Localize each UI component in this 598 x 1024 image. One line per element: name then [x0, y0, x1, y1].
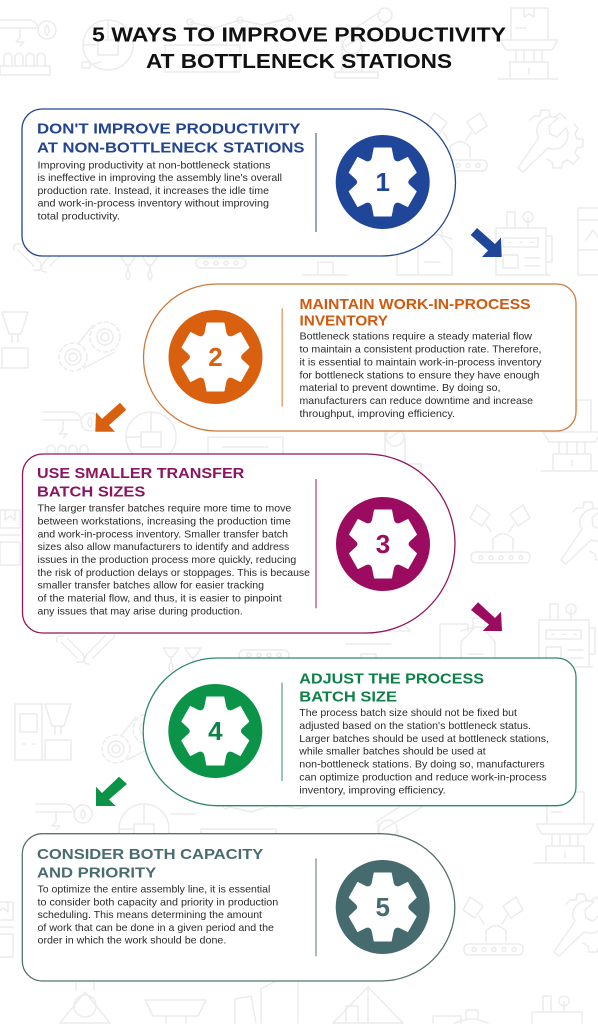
body text 1: total productivity. — [38, 211, 120, 223]
body text 3: of the material flow, and thus, it is easier to pinpoint — [38, 593, 282, 605]
panel: step 5 — [22, 834, 455, 981]
body text 4: The process batch size should not be fixed but — [299, 707, 517, 719]
title — [92, 24, 506, 73]
heading 3: BATCH SIZES — [37, 484, 145, 501]
body text 2: Bottleneck stations require a steady material flow — [300, 330, 532, 342]
body text 2: it is essential to maintain work-in-process inventory — [300, 356, 542, 368]
card outline 4 — [143, 658, 576, 806]
panel: step 4 — [143, 658, 576, 806]
heading 3: USE SMALLER TRANSFER — [37, 465, 244, 482]
heading 4: ADJUST THE PROCESS — [299, 670, 484, 687]
body text 4: inventory, improving efficiency. — [299, 785, 446, 797]
body text 2: for bottleneck stations to ensure they have enough — [300, 369, 540, 381]
heading 4 — [299, 670, 484, 706]
heading 2: INVENTORY — [300, 313, 388, 330]
icon: gear number 5 — [336, 860, 430, 954]
heading 5: CONSIDER BOTH CAPACITY — [37, 846, 263, 863]
body text 4: while smaller batches should be used at — [298, 746, 486, 758]
icon: gear number 2 — [168, 310, 262, 404]
body text 3: The larger transfer batches require more time to move — [38, 503, 291, 515]
body text 5: scheduling. This means determining the amount — [38, 909, 262, 921]
body text 5: to consider both capacity and priority in production — [38, 896, 278, 908]
heading 5: AND PRIORITY — [37, 865, 156, 882]
icon: gear number 3 — [336, 497, 430, 591]
card outline 1 — [22, 109, 456, 256]
body text 5: order in which the work should be done. — [38, 935, 226, 947]
body text 3: issues in the production process more quickly, reducing — [38, 554, 296, 566]
heading 3 — [37, 465, 244, 501]
body text 1: production rate. Instead, it increases the idle time — [38, 185, 269, 197]
icon: gear number 5: 5 — [375, 892, 390, 922]
arrow: step 1 to 2 — [471, 228, 502, 257]
body text 5: of work that can be done in a given period and the — [38, 922, 274, 934]
icon: gear number 4 — [168, 684, 262, 778]
heading 5 — [37, 846, 263, 882]
arrow: step 3 to 4 — [471, 602, 502, 631]
body text 3: smaller transfer batches allow for easier tracking — [38, 580, 264, 592]
body text 1 — [38, 159, 282, 223]
icon: gear number 4: 4 — [208, 716, 223, 746]
body text 4: Larger batches should be used at bottleneck stations, — [299, 733, 549, 745]
body text 5 — [38, 883, 278, 947]
panel: step 1 — [22, 109, 456, 256]
card outline 5 — [22, 834, 455, 981]
icon: gear number 1: 1 — [375, 167, 390, 197]
body text 2: material to prevent downtime. By doing so, — [300, 382, 500, 394]
card outline 3 — [22, 454, 455, 633]
body text 2: to maintain a consistent production rate. Therefore, — [300, 344, 542, 356]
heading 1: DON'T IMPROVE PRODUCTIVITY — [37, 121, 300, 138]
body text 2: manufacturers can reduce downtime and increase — [300, 395, 533, 407]
body text 1: is ineffective in improving the assembly line's overall — [38, 172, 282, 184]
body text 3 — [38, 503, 310, 617]
heading 2 — [300, 296, 530, 330]
heading 2: MAINTAIN WORK-IN-PROCESS — [300, 296, 530, 313]
body text 2 — [300, 330, 542, 420]
body text 1: Improving productivity at non-bottleneck stations — [38, 159, 270, 171]
body text 3: and work-in-process inventory. Smaller transfer batch — [38, 528, 288, 540]
arrow: step 4 to 5 — [96, 777, 127, 806]
body text 1: and work-in-process inventory without improving — [38, 198, 269, 210]
icon: gear number 1 — [336, 135, 430, 229]
body text 4 — [298, 707, 549, 797]
body text 4: non-bottleneck stations. By doing so, manufacturers — [299, 758, 545, 770]
body text 2: throughput, improving efficiency. — [300, 408, 455, 420]
panel: step 3 — [22, 454, 455, 633]
title: AT BOTTLENECK STATIONS — [146, 50, 452, 73]
heading 1 — [37, 121, 304, 156]
body text 3: sizes also allow manufacturers to identify and address — [38, 541, 289, 553]
body text 3: between workstations, increasing the production time — [38, 515, 291, 527]
body text 4: can optimize production and reduce work-in-process — [299, 772, 547, 784]
heading 4: BATCH SIZE — [299, 689, 397, 706]
body text 4: adjusted based on the station's bottleneck status. — [299, 720, 531, 732]
body text 3: the risk of production delays or stoppages. This is because — [38, 567, 310, 579]
body text 3: any issues that may arise during production. — [38, 605, 243, 617]
arrow: step 2 to 3 — [95, 403, 126, 432]
panel: step 2 — [144, 284, 576, 431]
heading 1: AT NON-BOTTLENECK STATIONS — [37, 139, 304, 156]
title: 5 WAYS TO IMPROVE PRODUCTIVITY — [92, 24, 506, 46]
card outline 2 — [144, 284, 576, 431]
icon: gear number 2: 2 — [208, 342, 223, 372]
body text 5: To optimize the entire assembly line, it is essential — [38, 883, 270, 895]
icon: gear number 3: 3 — [376, 529, 390, 559]
